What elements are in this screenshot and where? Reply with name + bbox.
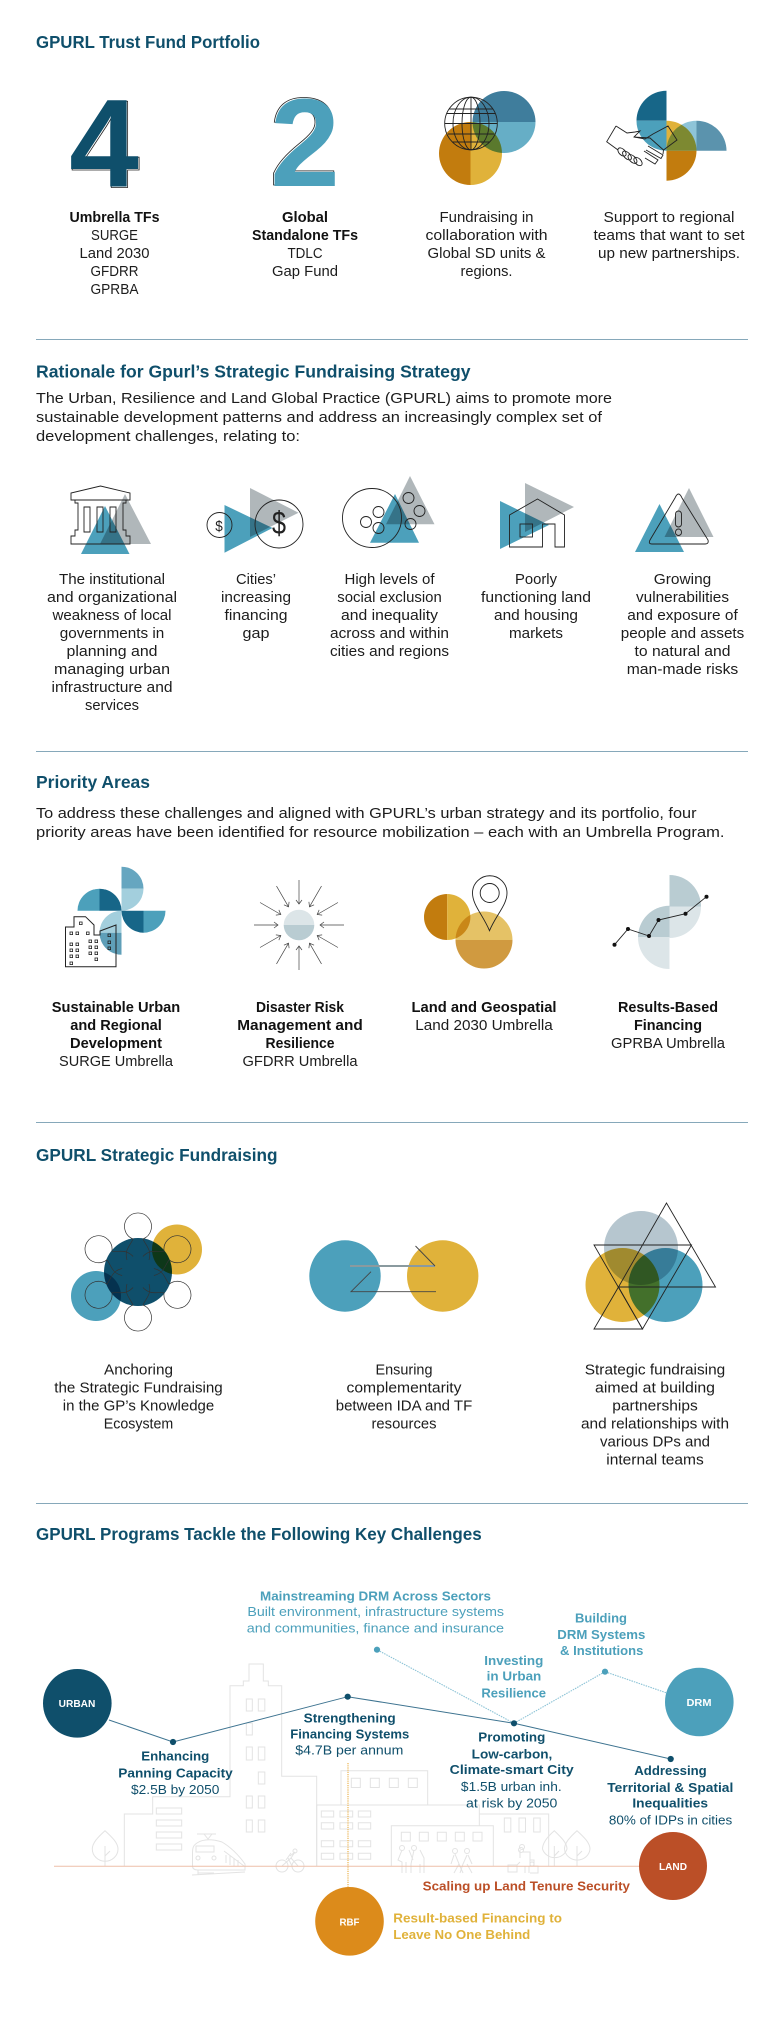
icon: pinwheel with building (66, 867, 166, 967)
icon: financing gap (207, 488, 303, 553)
text: land and housing markets: functioning land (481, 590, 591, 606)
label: building DRM systems: DRM Systems (557, 1627, 645, 1642)
panel: trust fund portfolio (36, 32, 744, 298)
text: building partnerships: various DPs and (600, 1434, 710, 1450)
text: land and geospatial: Land and Geospatial (412, 1000, 556, 1016)
label: addressing inequalities (607, 1763, 733, 1827)
text: umbrella TFs: Umbrella TFs (70, 210, 160, 226)
text: institutional weakness: services (85, 698, 139, 714)
text: disaster risk (237, 1000, 363, 1070)
text: vulnerabilities: and exposure of (627, 608, 739, 624)
icon: social exclusion (342, 476, 434, 548)
label: mainstreaming DRM: and communities, finance and insurance (247, 1621, 504, 1636)
label: strengthening financing systems: $4.7B per annum (295, 1743, 403, 1758)
text: social exclusion: social exclusion (337, 590, 442, 606)
text: priority paragraph: To address these challenges and aligned with GPURL’s urban strategy and its portfolio, four (36, 805, 696, 822)
icon: partnerships triangles (586, 1203, 716, 1329)
icon: map pin with circles (424, 876, 512, 968)
text: disaster risk: Management and (237, 1018, 363, 1034)
icon: institution (71, 486, 151, 554)
label: promoting low-carbon city: Promoting (478, 1730, 545, 1745)
text: institutional weakness: planning and (66, 644, 158, 660)
icon: number 4: 4 (70, 76, 140, 214)
text: global standalone TFs (252, 210, 358, 280)
label: mainstreaming DRM (247, 1589, 505, 1636)
label: result-based financing: Result-based Financing to (393, 1910, 562, 1925)
text: results-based financing: Results-Based (618, 1000, 718, 1016)
panel: strategic fundraising (36, 1145, 729, 1468)
text: social exclusion: and inequality (341, 608, 439, 624)
icon: handshake with quarter circles (607, 91, 726, 181)
text: ensuring complementarity: between IDA and TF (336, 1398, 472, 1414)
label: investing in urban resilience (481, 1653, 546, 1700)
text: financing gap: increasing (221, 590, 291, 606)
text: fundraising in collaboration (426, 210, 548, 280)
icon: risk arrows (254, 880, 344, 970)
land baseline (54, 1865, 640, 1867)
label: enhancing planning capacity: Panning Capacity (118, 1765, 234, 1780)
text: anchoring (54, 1362, 223, 1432)
text: ensuring complementarity: Ensuring (376, 1362, 432, 1378)
badge: LAND (639, 1832, 707, 1900)
text: results-based financing: GPRBA Umbrella (611, 1036, 726, 1052)
text: rationale paragraph (36, 390, 612, 445)
text: financing gap: gap (242, 626, 270, 642)
badge: RBF: RBF (340, 1916, 360, 1928)
heading: priority areas: Priority Areas (36, 772, 150, 792)
text: vulnerabilities (621, 572, 744, 678)
label: enhancing planning capacity (118, 1749, 234, 1797)
text: land and geospatial: Land 2030 Umbrella (415, 1018, 554, 1034)
icon: financing gap: $ (215, 518, 223, 535)
text: building partnerships: aimed at building (595, 1380, 715, 1396)
icon: globe with circles (439, 91, 536, 185)
text: institutional weakness (47, 572, 177, 714)
badge: URBAN: URBAN (59, 1698, 95, 1710)
label: addressing inequalities: Territorial & Spatial (607, 1780, 733, 1795)
text: sustainable urban: and Regional (70, 1018, 162, 1034)
text: anchoring: Anchoring (104, 1362, 173, 1378)
label: result-based financing: Leave No One Behind (393, 1927, 530, 1942)
text: fundraising in collaboration: Global SD units & (428, 246, 546, 262)
text: ensuring complementarity (336, 1362, 472, 1432)
text: vulnerabilities: man-made risks (627, 662, 738, 678)
icon: complementarity arrows (309, 1240, 478, 1312)
text: institutional weakness: weakness of local (51, 608, 172, 624)
text: building partnerships: partnerships (612, 1398, 698, 1414)
text: vulnerabilities: to natural and (634, 644, 730, 660)
text: priority paragraph (36, 805, 724, 841)
text: vulnerabilities: people and assets (621, 626, 744, 642)
label: mainstreaming DRM: Mainstreaming DRM Across Sectors (260, 1589, 491, 1604)
text: umbrella TFs (70, 210, 160, 298)
text: institutional weakness: and organizational (47, 590, 177, 606)
text: results-based financing: Financing (634, 1018, 702, 1034)
text: rationale paragraph: development challenges, relating to: (36, 428, 300, 445)
text: anchoring: Ecosystem (104, 1416, 173, 1432)
icon: number 2: 2 (269, 73, 339, 212)
label: mainstreaming DRM: Built environment, infrastructure systems (247, 1604, 505, 1619)
label: enhancing planning capacity: Enhancing (141, 1749, 209, 1764)
text: social exclusion: cities and regions (330, 644, 449, 660)
text: institutional weakness: managing urban (54, 662, 170, 678)
label: investing in urban resilience: Investing (484, 1653, 543, 1668)
text: land and housing markets: Poorly (515, 572, 558, 588)
label: strengthening financing systems (290, 1710, 409, 1758)
icon: knowledge ecosystem flower (71, 1213, 202, 1331)
text: priority paragraph: priority areas have been identified for resource mobilization – each with an Umbrella Program. (36, 824, 724, 841)
label: building DRM systems: & Institutions (560, 1643, 643, 1658)
text: social exclusion: across and within (330, 626, 449, 642)
text: umbrella TFs: GPRBA (90, 282, 139, 298)
icon: results chart (612, 875, 708, 969)
text: building partnerships: Strategic fundraising (585, 1362, 725, 1378)
heading: strategic fundraising: GPURL Strategic Fundraising (36, 1145, 278, 1165)
text: support to regional teams: Support to regional (604, 210, 734, 226)
label: strengthening financing systems: Financing Systems (290, 1727, 409, 1742)
label: enhancing planning capacity: $2.5B by 2050 (131, 1782, 219, 1797)
label: investing in urban resilience: in Urban (487, 1669, 541, 1684)
icon: house (500, 483, 574, 549)
text: global standalone TFs: Standalone TFs (252, 228, 358, 244)
panel: rationale (36, 362, 744, 714)
text: land and housing markets (481, 572, 591, 642)
text: ensuring complementarity: resources (372, 1416, 436, 1432)
text: institutional weakness: infrastructure and (52, 680, 172, 696)
label: addressing inequalities: 80% of IDPs in cities (609, 1812, 733, 1827)
label: addressing inequalities: Inequalities (632, 1796, 708, 1811)
text: rationale paragraph: sustainable development patterns and address an increasingly complex set of (36, 409, 603, 426)
text: support to regional teams (594, 210, 744, 262)
text: financing gap: financing (224, 608, 288, 624)
text: fundraising in collaboration: collaboration with (426, 228, 548, 244)
text: building partnerships: and relationships with (581, 1416, 729, 1432)
text: disaster risk: Disaster Risk (256, 1000, 345, 1016)
text: umbrella TFs: SURGE (91, 228, 138, 244)
text: global standalone TFs: Global (282, 210, 328, 226)
label: promoting low-carbon city (450, 1730, 575, 1811)
label: strengthening financing systems: Strengthening (304, 1710, 396, 1725)
text: umbrella TFs: GFDRR (90, 264, 138, 280)
heading: portfolio: GPURL Trust Fund Portfolio (36, 32, 260, 52)
text: support to regional teams: teams that want to set (594, 228, 744, 244)
label: promoting low-carbon city: $1.5B urban inh. (461, 1779, 562, 1794)
text: social exclusion (330, 572, 449, 660)
panel: key challenges (36, 1524, 734, 1956)
label: building DRM systems: Building (575, 1611, 627, 1626)
text: land and geospatial (412, 1000, 556, 1034)
label: land tenure security: Scaling up Land Tenure Security (423, 1879, 631, 1894)
badge: DRM (665, 1668, 734, 1736)
text: financing gap (221, 572, 291, 642)
text: global standalone TFs: TDLC (288, 246, 322, 262)
connector: urban line with points (109, 1694, 674, 1762)
heading: key challenges: GPURL Programs Tackle the Following Key Challenges (36, 1524, 482, 1544)
text: fundraising in collaboration: Fundraising in (440, 210, 534, 226)
badge: LAND: LAND (659, 1861, 687, 1873)
text: results-based financing (611, 1000, 726, 1052)
label: building DRM systems (557, 1611, 645, 1658)
text: umbrella TFs: Land 2030 (80, 246, 150, 262)
connector: DRM dotted line (374, 1647, 666, 1723)
label: promoting low-carbon city: Climate-smart City (450, 1762, 575, 1777)
connector: RBF dotted line (347, 1763, 349, 1888)
icon: warning (635, 488, 714, 552)
badge: DRM: DRM (686, 1697, 712, 1709)
label: investing in urban resilience: Resilience (481, 1685, 546, 1700)
text: building partnerships (581, 1362, 729, 1468)
label: promoting low-carbon city: Low-carbon, (472, 1746, 552, 1761)
text: sustainable urban: Sustainable Urban (52, 1000, 180, 1016)
text: ensuring complementarity: complementarity (346, 1380, 462, 1396)
badge: URBAN (43, 1669, 112, 1738)
label: result-based financing (393, 1910, 562, 1942)
text: global standalone TFs: Gap Fund (272, 264, 338, 280)
text: land and housing markets: and housing (494, 608, 578, 624)
text: disaster risk: Resilience (266, 1036, 334, 1052)
text: sustainable urban: Development (70, 1036, 162, 1052)
text: institutional weakness: The institutional (59, 572, 165, 588)
icon: number 2: 2 (270, 74, 340, 213)
text: vulnerabilities: vulnerabilities (636, 590, 729, 606)
text: rationale paragraph: The Urban, Resilience and Land Global Practice (GPURL) aims to promote more (36, 390, 612, 407)
text: support to regional teams: up new partnerships. (598, 246, 740, 262)
text: sustainable urban: SURGE Umbrella (59, 1054, 174, 1070)
text: building partnerships: internal teams (606, 1452, 704, 1468)
panel: priority areas (36, 772, 726, 1070)
text: disaster risk: GFDRR Umbrella (242, 1054, 358, 1070)
heading: rationale: Rationale for Gpurl’s Strategic Fundraising Strategy (36, 362, 471, 382)
badge: RBF (315, 1887, 384, 1956)
text: social exclusion: High levels of (344, 572, 435, 588)
text: fundraising in collaboration: regions. (460, 264, 512, 280)
illustration: city skyline (92, 1664, 590, 1875)
text: financing gap: Cities’ (236, 572, 276, 588)
icon: number 4: 4 (69, 74, 139, 214)
text: anchoring: in the GP’s Knowledge (63, 1398, 214, 1414)
label: addressing inequalities: Addressing (634, 1763, 707, 1778)
text: sustainable urban (52, 1000, 180, 1070)
text: anchoring: the Strategic Fundraising (54, 1380, 223, 1396)
icon: financing gap: $ (272, 505, 286, 541)
text: institutional weakness: governments in (60, 626, 164, 642)
label: promoting low-carbon city: at risk by 2050 (466, 1796, 557, 1811)
text: vulnerabilities: Growing (654, 572, 711, 588)
text: land and housing markets: markets (509, 626, 563, 642)
